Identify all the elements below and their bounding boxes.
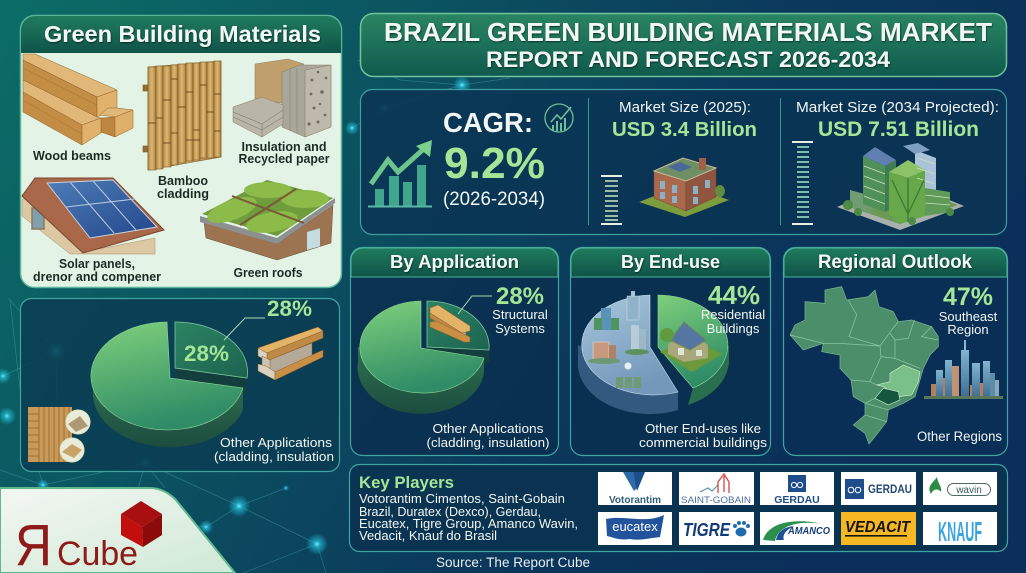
- market size 2034 label: Market Size (2034 Projected):: [796, 99, 999, 116]
- market size 2025 label: Market Size (2025):: [619, 99, 751, 116]
- logo: Wavin: [923, 472, 997, 505]
- green roofs label: Green roofs: [234, 266, 303, 280]
- solar label: drenor and compener: [33, 270, 161, 284]
- pie inner value: 28%: [184, 341, 229, 366]
- insulation label: Insulation and: [242, 140, 326, 154]
- logo: Vedacit: VEDACIT: [845, 519, 911, 536]
- icon: large green complex: [837, 143, 964, 230]
- by end-use header: [571, 248, 770, 277]
- key players list: [359, 492, 578, 543]
- logo: Eucatex: [598, 512, 672, 545]
- icon: insulation blocks: [233, 59, 331, 137]
- market size 2034 value: USD 7.51 Billion: [818, 118, 979, 141]
- bamboo label: Bamboo: [158, 174, 208, 188]
- logo: Tigre: [679, 512, 754, 545]
- southeast region label: Region: [947, 322, 989, 337]
- other applications label: (cladding, insulation): [426, 435, 550, 450]
- panel: key players: [350, 464, 1008, 552]
- bamboo label: [157, 174, 209, 201]
- panel: market stats: [360, 90, 1006, 234]
- logo: Saint-Gobain: SAINT-GOBAIN: [681, 495, 751, 505]
- by end-use heading: By End-use: [621, 252, 720, 272]
- icon: city skyline: [924, 340, 1003, 399]
- callout line: [224, 318, 265, 340]
- logo: Saint-Gobain: [679, 472, 754, 505]
- market size 2025 value: USD 3.4 Billion: [612, 118, 757, 141]
- structural systems label: Systems: [495, 321, 545, 336]
- regional header: [784, 248, 1007, 277]
- other end-uses label: commercial buildings: [639, 435, 768, 450]
- other applications label: [214, 435, 334, 464]
- icon: wood beams: [23, 54, 133, 145]
- source line: Source: The Report Cube: [436, 555, 590, 570]
- other regions label: Other Regions: [917, 429, 1002, 444]
- regional heading: Regional Outlook: [818, 252, 972, 273]
- structural systems label: Structural: [492, 307, 548, 322]
- materials header: [21, 16, 341, 53]
- logo: Gerdau stacked: GERDAU: [774, 494, 820, 506]
- CAGR label: CAGR:: [443, 107, 533, 138]
- panel: application pie: [20, 296, 340, 472]
- logo: Wavin: wavin: [955, 485, 982, 496]
- pie chart: by application: [358, 301, 489, 414]
- icon: small green building: [639, 158, 729, 217]
- panel: regional outlook: [784, 248, 1008, 456]
- icon: green roof: [200, 180, 335, 260]
- map of Brazil: [790, 287, 938, 444]
- callout line: [458, 296, 492, 314]
- panel: by application: [350, 248, 558, 456]
- materials heading: Green Building Materials: [44, 21, 321, 47]
- icon: I-beam: [430, 305, 470, 342]
- logo: Gerdau stacked: [760, 472, 834, 506]
- by application header: [351, 248, 558, 277]
- icon: cladding stack: [28, 407, 90, 462]
- icon: green house: [660, 322, 722, 372]
- logo: Knauf: [923, 512, 997, 547]
- divider: [588, 98, 780, 225]
- scale bar 2025: [601, 176, 622, 224]
- logo: Votorantim: [598, 472, 672, 506]
- residential buildings label: Residential: [701, 307, 765, 322]
- wood beams label: Wood beams: [33, 149, 111, 163]
- key players list: Vedacit, Knauf do Brasil: [359, 529, 497, 543]
- other end-uses label: [639, 421, 768, 450]
- icon: solar roof house: [22, 178, 164, 254]
- other end-uses label: Other End-uses like: [645, 421, 761, 436]
- logo: Amanco: [760, 512, 834, 545]
- residential buildings label: Buildings: [707, 321, 760, 336]
- CAGR value: 9.2%: [444, 139, 545, 188]
- logo: Votorantim: Votorantim: [609, 495, 661, 506]
- other applications label: [426, 421, 550, 450]
- key players list: Eucatex, Tigre Group, Amanco Wavin,: [359, 517, 578, 531]
- panel: green building materials: [20, 16, 342, 288]
- logo: Tigre: TIGRE: [683, 520, 731, 540]
- key players list: Votorantim Cimentos, Saint-Gobain: [359, 492, 565, 506]
- value: 44 percent: 44%: [708, 280, 760, 310]
- other applications label: Other Applications: [220, 435, 333, 450]
- logo: Eucatex: eucatex: [612, 519, 658, 534]
- solar label: [33, 257, 161, 284]
- logo wordmark cube: Cube: [57, 535, 138, 573]
- callout value: 28%: [267, 296, 312, 321]
- icon: bamboo cladding: [143, 61, 221, 170]
- logo: Gerdau horizontal: GERDAU: [868, 484, 912, 496]
- pie chart: 28 percent: [91, 322, 248, 447]
- icon: growth chart: [368, 140, 432, 208]
- solar label: Solar panels,: [59, 257, 135, 271]
- pie chart: by end-use: [578, 291, 729, 414]
- logo: RCube: [0, 488, 235, 573]
- logo: Vedacit: [841, 512, 916, 545]
- value: 28 percent: 28%: [496, 283, 544, 310]
- southeast region label: Southeast: [939, 309, 998, 324]
- main title: BRAZIL GREEN BUILDING MATERIALS MARKET: [384, 17, 992, 47]
- by application heading: By Application: [390, 251, 519, 272]
- logo: Amanco: AMANCO: [787, 525, 830, 537]
- residential buildings label: [701, 307, 765, 336]
- logo cube: [121, 501, 162, 547]
- panel: title: [360, 14, 1006, 76]
- key players list: Brazil, Duratex (Dexco), Gerdau,: [359, 505, 541, 519]
- bamboo label: cladding: [157, 187, 209, 201]
- scale bar 2034: [792, 142, 813, 224]
- other applications label: Other Applications: [432, 421, 544, 436]
- structural systems label: [492, 307, 548, 336]
- panel: by end-use: [570, 248, 770, 456]
- logo: Gerdau horizontal: [841, 472, 916, 505]
- other applications label: (cladding, insulation: [214, 449, 334, 464]
- network pattern: [0, 60, 510, 573]
- subtitle: REPORT AND FORECAST 2026-2034: [486, 47, 890, 72]
- key players heading: Key Players: [359, 474, 454, 492]
- insulation label: [238, 140, 330, 166]
- icon: office towers: [588, 291, 649, 388]
- icon: I-beam: [258, 327, 323, 380]
- CAGR period: (2026-2034): [443, 189, 545, 210]
- icon: small growth circle: [545, 104, 573, 132]
- insulation label: Recycled paper: [238, 152, 330, 166]
- value: 47 percent: 47%: [943, 283, 993, 311]
- southeast region label: [939, 309, 998, 337]
